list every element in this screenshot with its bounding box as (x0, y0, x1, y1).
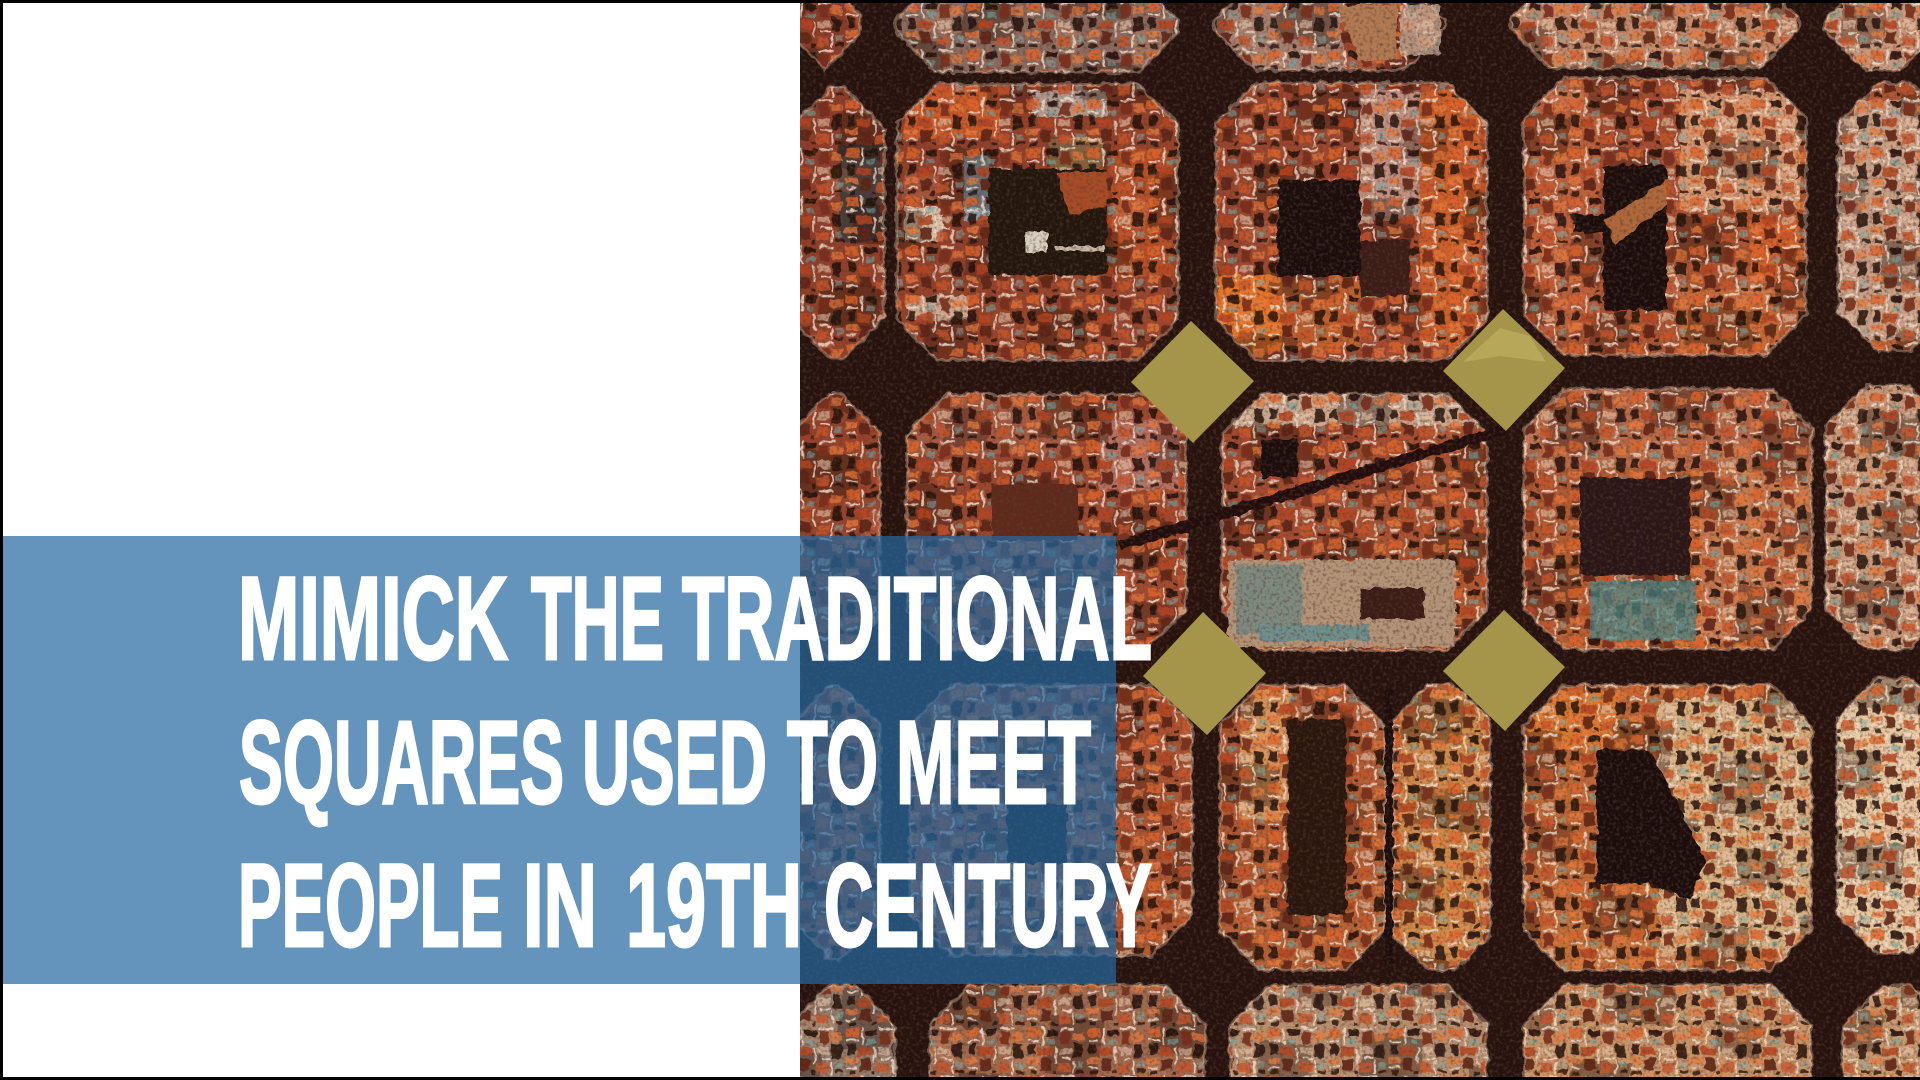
title: TRADITIONAL (682, 553, 1152, 685)
title: MEET (896, 697, 1091, 829)
title: SQUARES (239, 697, 564, 829)
diamond marker: bottom right (1443, 610, 1565, 731)
title: 19TH (626, 840, 802, 972)
title: IN (523, 840, 597, 972)
translucent blue title panel (0, 536, 1116, 984)
title (238, 553, 1152, 972)
title: THE (531, 553, 664, 685)
title: TO (787, 697, 878, 829)
aerial photo of city grid (780, 0, 1920, 1080)
title: CENTURY (824, 840, 1152, 972)
diamond marker: top right (1443, 309, 1565, 431)
title: MIMICK (238, 553, 508, 685)
title: PEOPLE (238, 840, 503, 972)
diamond marker: bottom left (1143, 612, 1266, 735)
title: USED (582, 697, 767, 829)
diamond marker: top left (1131, 321, 1254, 443)
